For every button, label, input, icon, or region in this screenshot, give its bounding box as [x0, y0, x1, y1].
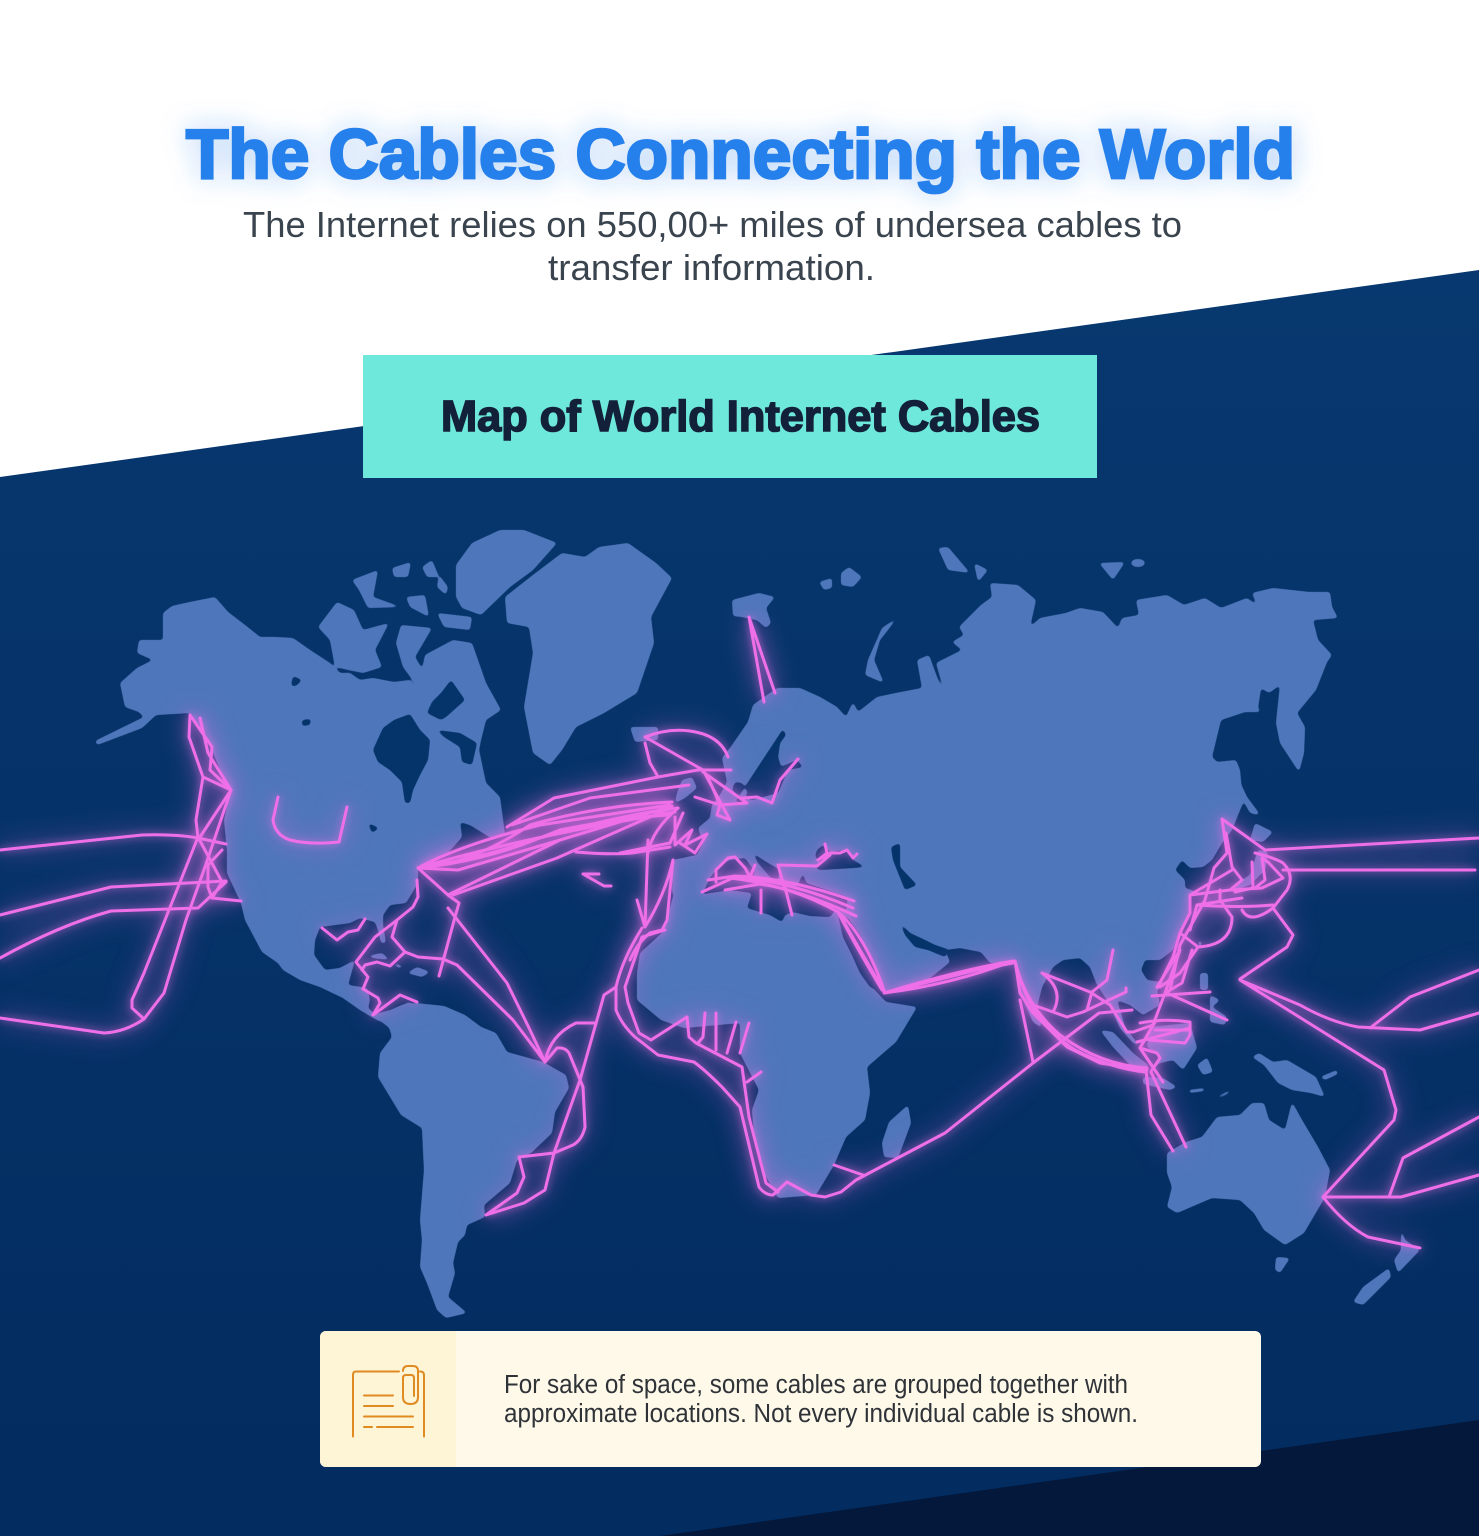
- submarine cable network: [0, 617, 1479, 1248]
- note text: approximate locations. Not every individual cable is shown.: [504, 1400, 1138, 1428]
- background: dark corner wedge: [660, 1420, 1479, 1536]
- landmass: North America: [95, 597, 505, 1030]
- cables: Brazil and South Atlantic: [486, 987, 616, 1215]
- cables: South China Sea: [1140, 950, 1227, 1048]
- cables: transatlantic bundle: [418, 770, 731, 895]
- cables: Arabian Sea to India: [884, 961, 1013, 993]
- landmass: Caribbean islands: [367, 953, 430, 977]
- cable: Norway to Svalbard: [749, 617, 775, 702]
- landmass: Eurasia: [672, 583, 1338, 1047]
- map heading banner: Map of World Internet Cables: [441, 392, 1040, 441]
- landmass: Svalbard: [732, 593, 775, 628]
- title: The Cables Connecting the World: [186, 115, 1295, 193]
- landmass: Japan: [1232, 782, 1273, 890]
- landmass: UK: [675, 777, 697, 803]
- cables: North Pacific to North America: [0, 790, 241, 1033]
- landmass: Arctic islands: [318, 530, 557, 690]
- landmass: Southeast Asia islands: [1100, 940, 1264, 1098]
- cables: Iberian coast: [620, 808, 707, 960]
- icon: document with paperclip: [353, 1366, 424, 1436]
- landmass: New Guinea: [1252, 1053, 1325, 1097]
- subtitle: transfer information.: [548, 247, 875, 288]
- note icon tile: [320, 1331, 456, 1467]
- landmass: South America: [373, 1003, 569, 1318]
- landmass: Australia: [1167, 1102, 1330, 1245]
- landmass: Madagascar: [882, 1105, 911, 1158]
- subtitle: The Internet relies on 550,00+ miles of undersea cables to: [243, 204, 1182, 245]
- cables: West Africa route: [616, 928, 1132, 1197]
- note text: For sake of space, some cables are grouped together with: [504, 1371, 1128, 1399]
- cables: Mediterranean bundle and Red Sea: [702, 844, 885, 993]
- cables: Pacific to Australia and Americas: [1240, 970, 1479, 1248]
- cables: East Asia and Japan: [1158, 819, 1479, 990]
- cables: Indonesia to Western Australia: [1146, 1070, 1186, 1151]
- subtitle: [243, 204, 1182, 288]
- cables: Caribbean and Americas east coast: [322, 840, 560, 1062]
- cable: US inland loop: [273, 797, 347, 843]
- landmass: Tasmania: [1275, 1257, 1290, 1273]
- inland seas and bays: [291, 676, 950, 994]
- landmass: Africa: [637, 890, 917, 1198]
- landmass: Greenland: [505, 543, 672, 765]
- cables: Western Europe and Iceland: [645, 730, 798, 820]
- map heading banner: [363, 355, 1097, 478]
- cables: Singapore hub: [1137, 1020, 1190, 1082]
- landmass: New Zealand: [1353, 1228, 1420, 1305]
- cables: Alaska and Pacific coast: [189, 715, 231, 838]
- note text: [504, 1371, 1138, 1428]
- note background panel: [320, 1331, 1261, 1467]
- landmass: Arctic Russian islands: [819, 547, 1145, 683]
- cables: India to Southeast Asia: [1015, 950, 1153, 1072]
- landmass: Iceland: [630, 727, 658, 742]
- note callout: [320, 1331, 1261, 1467]
- world map landmasses: [95, 530, 1420, 1318]
